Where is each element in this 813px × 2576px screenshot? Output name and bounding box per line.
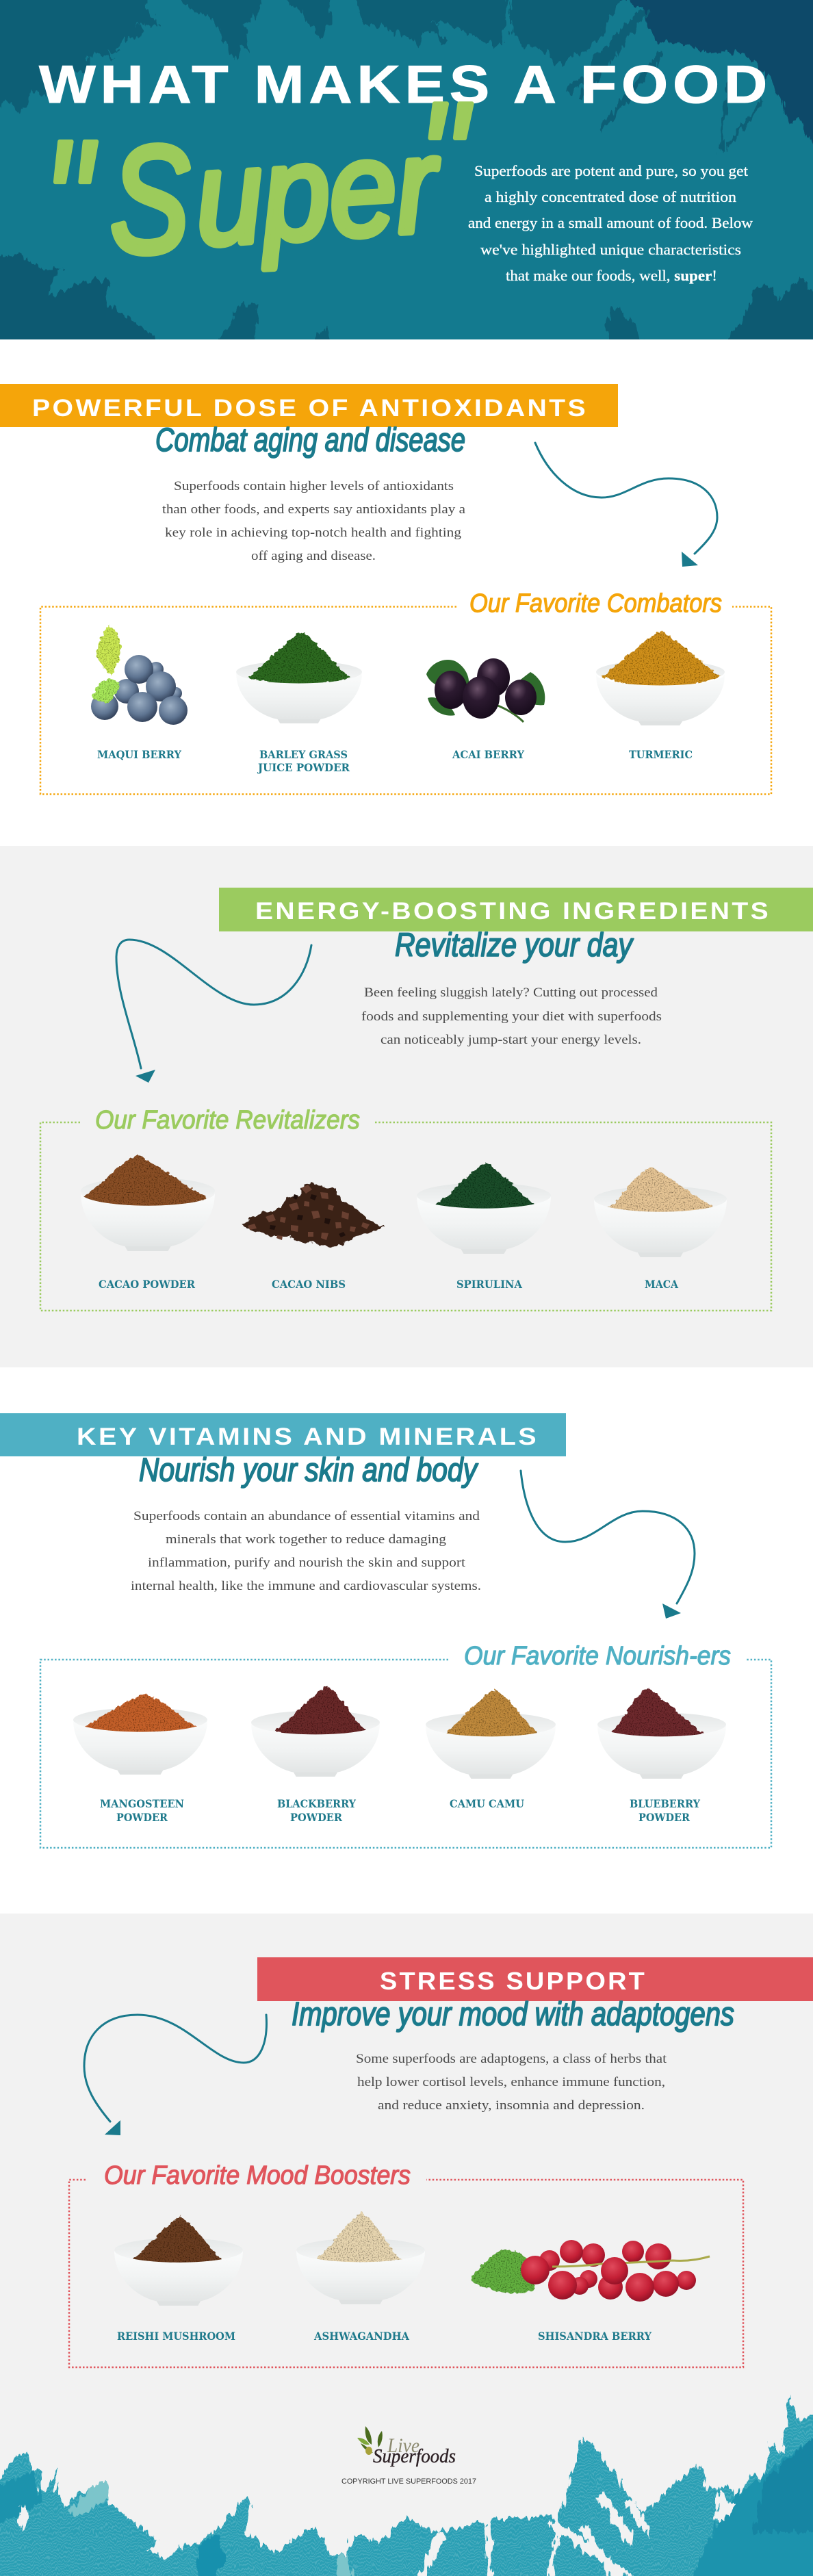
label: cacao powder: CACAO POWDER <box>99 1278 195 1291</box>
panel: stress <box>69 1957 813 2367</box>
script subheading: nourish: Nourish your skin and body <box>139 1452 479 1489</box>
header intro text: a highly concentrated dose of nutrition <box>485 188 736 205</box>
banner: antioxidants: POWERFUL DOSE OF ANTIOXIDANTS <box>32 395 588 422</box>
banner: energy: ENERGY-BOOSTING INGREDIENTS <box>255 898 771 925</box>
logo icon: olive branch <box>357 2426 383 2455</box>
copyright: COPYRIGHT LIVE SUPERFOODS 2017 <box>341 2477 476 2486</box>
logo: live superfoods: Live <box>387 2434 420 2457</box>
body text: energy: foods and supplementing your diet with superfoods <box>361 1009 662 1024</box>
body text: antioxidants: key role in achieving top-notch health and fighting <box>165 526 462 540</box>
label: mangosteen powder: MANGOSTEEN <box>100 1797 184 1810</box>
label: blueberry powder: POWDER <box>638 1811 690 1824</box>
body text: stress: Some superfoods are adaptogens, a class of herbs that <box>356 2052 667 2066</box>
footer gaps <box>19 2491 736 2576</box>
label: blackberry powder: BLACKBERRY <box>277 1797 357 1810</box>
header intro text <box>468 162 753 284</box>
food: ashwagandha bowl <box>296 2212 425 2304</box>
headline: what makes a food: WHAT MAKES A FOOD <box>39 54 772 114</box>
banner: stress: STRESS SUPPORT <box>380 1967 647 1995</box>
dotted box: revitalizers <box>40 1122 771 1311</box>
panel: energy <box>40 888 813 1311</box>
label: ashwagandha: ASHWAGANDHA <box>313 2330 410 2343</box>
food: shisandra berry <box>471 2240 710 2302</box>
script subheading: combat aging: Combat aging and disease <box>155 422 465 459</box>
label: reishi mushroom: REISHI MUSHROOM <box>117 2330 235 2343</box>
body text: energy <box>361 986 662 1047</box>
arrow: antioxidants <box>535 443 717 567</box>
body text: vitamins <box>131 1509 481 1593</box>
headline: super script word: uper <box>191 109 445 274</box>
header brush strokes <box>0 0 813 345</box>
body text: vitamins: Superfoods contain an abundance of essential vitamins and <box>133 1509 480 1523</box>
body text: energy: Been feeling sluggish lately? Cutting out processed <box>364 986 658 1000</box>
panel: vitamins <box>0 1413 771 1848</box>
body text: stress <box>356 2052 667 2113</box>
header intro text: that make our foods, well, super! <box>506 267 717 284</box>
body text: energy: can noticeably jump-start your energy levels. <box>380 1033 641 1047</box>
footer tints <box>0 2436 813 2576</box>
label: cacao nibs: CACAO NIBS <box>272 1278 346 1291</box>
box title: combators: Our Favorite Combators <box>469 589 722 618</box>
body text: antioxidants: Superfoods contain higher levels of antioxidants <box>174 479 454 493</box>
box title: revitalizers: Our Favorite Revitalizers <box>95 1106 360 1135</box>
script subheading: revitalize: Revitalize your day <box>395 927 634 964</box>
body text: stress: and reduce anxiety, insomnia and depression. <box>378 2098 645 2113</box>
label: mangosteen powder: POWDER <box>116 1811 168 1824</box>
banner: energy <box>219 888 813 931</box>
arrow: energy <box>116 940 311 1083</box>
food: turmeric bowl <box>596 631 725 725</box>
arrow: vitamins <box>521 1471 695 1619</box>
label: maqui berry: MAQUI BERRY <box>97 748 182 761</box>
label: barley grass juice powder <box>257 748 350 774</box>
body text: vitamins: inflammation, purify and nourish the skin and support <box>148 1556 466 1570</box>
body text: vitamins: minerals that work together to reduce damaging <box>166 1532 447 1547</box>
food: cacao powder bowl <box>81 1155 215 1251</box>
food: blueberry bowl <box>597 1688 726 1779</box>
footer brush strokes <box>0 2395 813 2576</box>
food: barley grass bowl <box>236 632 362 723</box>
label: acai berry: ACAI BERRY <box>452 748 525 761</box>
banner: stress <box>257 1957 813 2001</box>
label: camu camu: CAMU CAMU <box>450 1797 524 1810</box>
body text: antioxidants: off aging and disease. <box>251 549 376 563</box>
food: blackberry bowl <box>251 1686 380 1777</box>
label: barley grass juice powder: BARLEY GRASS <box>259 748 348 761</box>
food: spirulina bowl <box>417 1163 551 1254</box>
label: barley grass juice powder: JUICE POWDER <box>257 761 350 774</box>
logo: live superfoods <box>357 2426 456 2467</box>
box title: nourishers: Our Favorite Nourish-ers <box>464 1642 731 1671</box>
panel: antioxidants <box>0 384 771 794</box>
header panel <box>0 0 813 345</box>
banner: vitamins <box>0 1413 566 1456</box>
diagonal streaks <box>430 9 763 153</box>
headline: super script word <box>42 70 472 309</box>
dotted box: combators <box>40 606 771 794</box>
body text: antioxidants <box>162 479 466 563</box>
box title: mood boosters: Our Favorite Mood Boosters <box>104 2161 411 2190</box>
logo: live superfoods: Superfoods <box>373 2446 456 2467</box>
food: cacao nibs <box>241 1183 383 1247</box>
body text: stress: help lower cortisol levels, enhance immune function, <box>357 2075 665 2089</box>
food: maqui berry <box>91 625 188 725</box>
label: spirulina: SPIRULINA <box>456 1278 523 1291</box>
dotted box: mood boosters <box>69 2180 743 2367</box>
banner: vitamins: KEY VITAMINS AND MINERALS <box>77 1424 539 1450</box>
food: mangosteen bowl <box>73 1694 207 1775</box>
food: camu camu bowl <box>426 1689 556 1779</box>
arrow: stress <box>84 2015 266 2135</box>
header intro text: we've highlighted unique characteristics <box>480 241 741 258</box>
label: turmeric: TURMERIC <box>629 748 693 761</box>
label: blackberry powder <box>277 1797 357 1824</box>
label: maca: MACA <box>645 1278 679 1291</box>
headline: super script word: " <box>42 103 99 309</box>
body text: vitamins: internal health, like the immune and cardiovascular systems. <box>131 1579 481 1593</box>
body text: antioxidants: than other foods, and experts say antioxidants play a <box>162 502 466 517</box>
food: reishi bowl <box>114 2216 243 2306</box>
header intro text: and energy in a small amount of food. Below <box>468 214 753 231</box>
banner: antioxidants <box>0 384 618 427</box>
script subheading: improve mood: Improve your mood with adaptogens <box>292 1996 734 2033</box>
dotted box: nourishers <box>40 1660 771 1848</box>
label: shisandra berry: SHISANDRA BERRY <box>538 2330 652 2343</box>
headline: super script word: S <box>110 115 190 285</box>
label: blueberry powder <box>630 1797 701 1824</box>
food: acai berry <box>426 658 545 722</box>
label: mangosteen powder <box>100 1797 184 1824</box>
food: maca bowl <box>594 1167 727 1257</box>
header intro text: Superfoods are potent and pure, so you get <box>474 162 748 179</box>
label: blueberry powder: BLUEBERRY <box>630 1797 701 1810</box>
headline: super script word: " <box>417 70 472 246</box>
label: blackberry powder: POWDER <box>290 1811 342 1824</box>
